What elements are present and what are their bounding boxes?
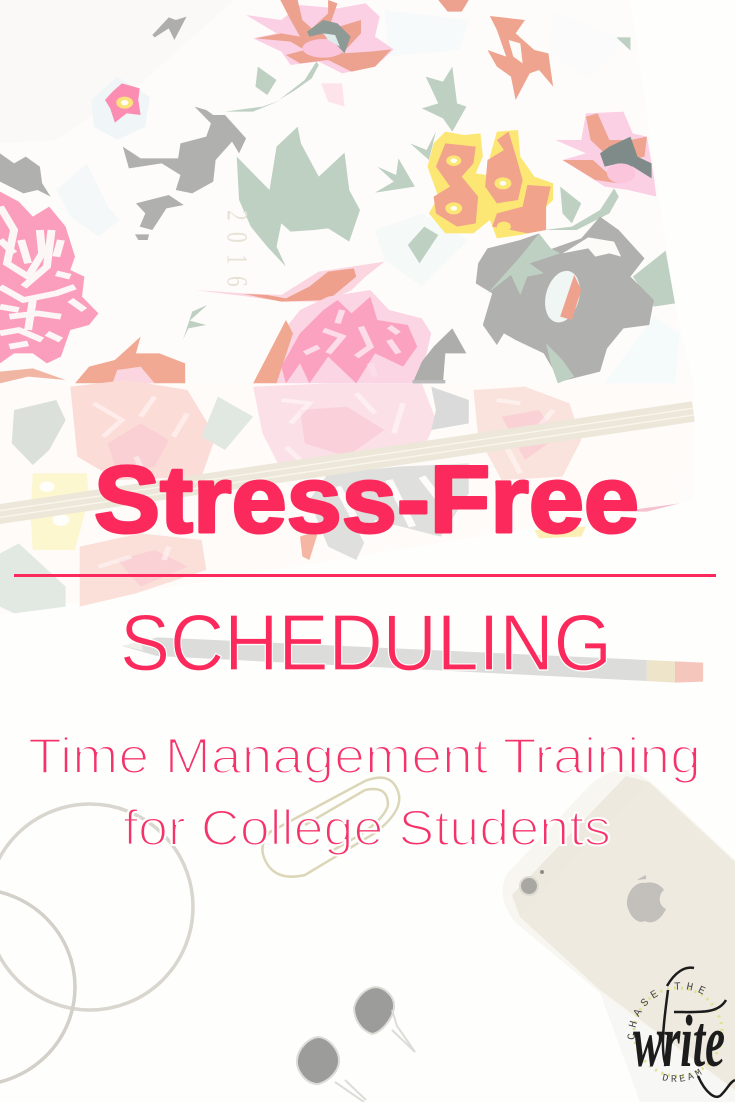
subtitle line two: for College Students	[123, 800, 611, 856]
icon: green leaves by blossoms	[375, 67, 466, 263]
icon: apple logo	[627, 875, 666, 922]
overlay: lighter band behind title	[0, 383, 735, 718]
logo: Chase the Write Dream: DREAM	[662, 1068, 702, 1082]
subtitle line one: Time Management Training	[28, 728, 701, 784]
icon: top pink flower	[225, 0, 394, 112]
icon: gray petals left	[0, 107, 246, 240]
title: Stress-Free: Stress-Free	[94, 447, 639, 553]
icon: pink peony centre	[253, 290, 431, 383]
icon: top right coral flower	[438, 0, 553, 100]
icon: gray petal lower centre	[412, 328, 466, 383]
heading: SCHEDULING: SCHEDULING	[120, 598, 612, 687]
divider line	[14, 574, 716, 577]
icon: pencil	[122, 637, 703, 683]
text: faint year on cover: 2016	[220, 210, 254, 298]
icon: pink peony left	[0, 192, 98, 363]
icon: yellow and coral blossoms	[428, 130, 553, 238]
icon: green leaf	[237, 127, 360, 267]
photo: floral planner cover	[0, 0, 735, 718]
icon: small green sprig	[183, 305, 207, 340]
icon: coral rose lower left	[75, 337, 185, 383]
strip: planner page edge	[0, 401, 695, 524]
texture: jagged highlights on pale roses	[94, 393, 553, 567]
icon: butterfly leaf	[195, 262, 384, 302]
icon: dark poppy	[476, 217, 654, 383]
icon: small gray leaf	[152, 17, 187, 40]
logo: Chase the Write Dream	[627, 966, 735, 1098]
icon: bangle bracelets	[0, 804, 193, 1085]
icon: pair of earrings	[297, 987, 415, 1102]
photo: planner lower half	[0, 380, 703, 683]
photo: desk accessories	[0, 770, 735, 1102]
icon: gold iPhone	[503, 770, 735, 1102]
icon: right pink flower	[544, 112, 656, 230]
icon: paperclip	[262, 778, 399, 877]
icon: small pink blossom	[105, 83, 141, 123]
logo: Chase the Write Dream: CHASE THE	[627, 982, 706, 1040]
